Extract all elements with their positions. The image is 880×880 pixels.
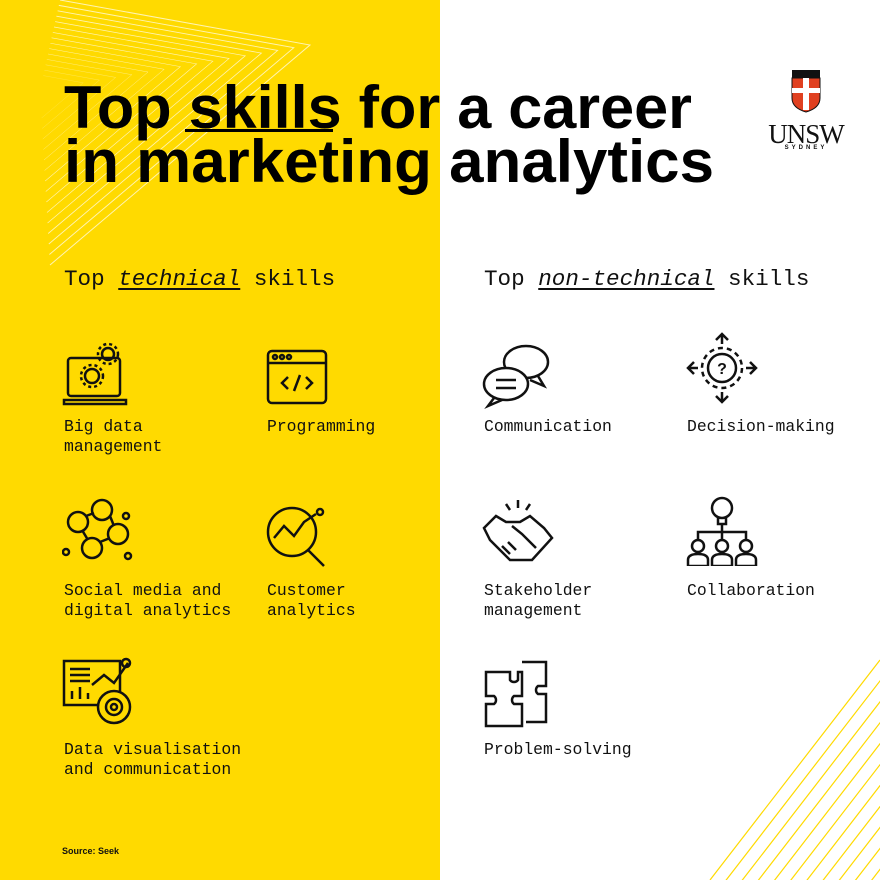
decorative pattern bottom-right: [710, 660, 880, 880]
label: customer analytics: analytics: [267, 601, 356, 620]
title: [64, 74, 714, 195]
label: stakeholder: management: [484, 601, 582, 620]
label: communication: Communication: [484, 417, 612, 436]
subheading: technical: Top technical skills: [64, 266, 335, 292]
icon: stakeholder handshake: [482, 500, 554, 562]
label: programming: Programming: [267, 417, 375, 436]
label: stakeholder: [484, 581, 592, 620]
icon: customer analytics: [266, 506, 325, 567]
subheading: non-technical: Top non-technical skills: [484, 266, 809, 292]
label: customer analytics: [267, 581, 356, 620]
icon: data viz: [62, 658, 132, 724]
label: data visualisation: and communication: [64, 760, 231, 779]
label: customer analytics: Customer: [267, 581, 346, 600]
source: Source: Seek: [62, 846, 119, 856]
label: social media: [64, 581, 231, 620]
icon: communication: [482, 344, 550, 409]
label: decision-making: Decision-making: [687, 417, 835, 436]
icon: social media: [62, 498, 132, 560]
label: problem-solving: Problem-solving: [484, 740, 632, 759]
icon: decision-making: ?: [717, 361, 727, 378]
label: stakeholder: Stakeholder: [484, 581, 592, 600]
logo: UNSW: UNSW: [768, 119, 844, 149]
icon: laptop gears: [62, 342, 128, 406]
label: big data: Big data: [64, 417, 143, 436]
icon: puzzle: [484, 660, 548, 728]
logo: UNSW: [768, 70, 845, 151]
label: collaboration: Collaboration: [687, 581, 815, 600]
label: data visualisation: Data visualisation: [64, 740, 241, 759]
label: data visualisation: [64, 740, 241, 779]
title: Top skills for a career: [64, 74, 692, 141]
label: social media: Social media and: [64, 581, 221, 600]
logo: UNSW: SYDNEY: [785, 145, 827, 151]
icon: collaboration: [686, 496, 758, 566]
icon: programming: [266, 350, 328, 404]
label: big data: management: [64, 437, 162, 456]
icon: decision-making: [686, 332, 758, 404]
label: social media: digital analytics: [64, 601, 231, 620]
title: in marketing analytics: [64, 128, 714, 195]
decorative pattern top-left: [42, 0, 311, 266]
label: big data: [64, 417, 162, 456]
